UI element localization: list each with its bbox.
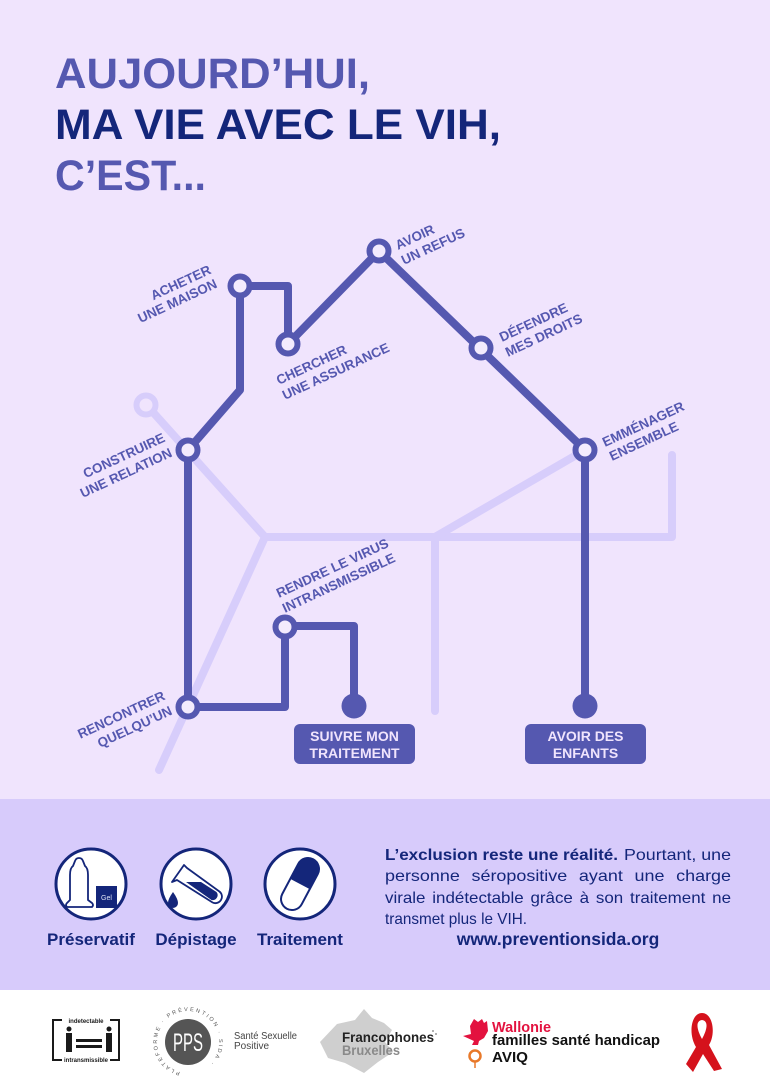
tag: suivre mon traitement: SUIVRE MON bbox=[310, 728, 399, 744]
text block: exclusion message: L’exclusion reste une réalité. bbox=[385, 847, 618, 864]
website link: www.preventionsida.org bbox=[456, 929, 659, 949]
label: acheter une maison: UNE MAISON bbox=[135, 276, 219, 326]
label: rencontrer quelqu'un: RENCONTRER bbox=[75, 688, 168, 742]
label: défendre mes droits: MES DROITS bbox=[503, 311, 585, 360]
title: MA VIE AVEC LE VIH, bbox=[55, 101, 501, 149]
label: avoir un refus: UN REFUS bbox=[399, 225, 467, 268]
label: emménager ensemble: EMMÉNAGER bbox=[600, 399, 687, 450]
tag: suivre mon traitement bbox=[294, 724, 415, 764]
logo: wallonie aviq: AVIQ bbox=[492, 1050, 528, 1066]
title: C’EST... bbox=[55, 152, 206, 200]
logo: wallonie aviq: Wallonie bbox=[492, 1020, 551, 1036]
label: rendre le virus intransmissible: RENDRE LE VIRUS bbox=[274, 536, 391, 601]
logo: i=i: indetectable bbox=[68, 1019, 104, 1025]
label: rendre le virus intransmissible: INTRANSMISSIBLE bbox=[280, 550, 398, 616]
label: construire une relation: UNE RELATION bbox=[78, 445, 174, 501]
icon: condom and gel: Gel bbox=[101, 895, 112, 902]
logo: plateforme prévention sida bbox=[153, 1007, 297, 1076]
label: chercher une assurance: UNE ASSURANCE bbox=[280, 340, 392, 403]
title bbox=[55, 50, 501, 200]
text block: exclusion message: Pourtant, une bbox=[624, 847, 731, 864]
logo: i=i bbox=[53, 1019, 119, 1064]
panel: partner logos bbox=[0, 990, 770, 1089]
tag: avoir des enfants: ENFANTS bbox=[553, 745, 618, 761]
text block: exclusion message bbox=[385, 847, 731, 928]
icon labels: Dépistage bbox=[155, 930, 237, 949]
label: rencontrer quelqu'un: QUELQU’UN bbox=[95, 703, 174, 751]
logo: francophones bruxelles: Francophones bbox=[342, 1030, 434, 1045]
logo: francophones bruxelles: Bruxelles bbox=[342, 1043, 400, 1058]
label: chercher une assurance: CHERCHER bbox=[274, 342, 349, 388]
icon: pill bbox=[265, 849, 335, 919]
terminus stations bbox=[342, 694, 598, 718]
logo: wallonie aviq: familles santé handicap bbox=[492, 1033, 660, 1049]
logo: francophones bruxelles bbox=[320, 1009, 437, 1073]
text block: exclusion message: virale indétectable grâce à son traitement ne bbox=[385, 890, 731, 907]
house metro line bbox=[188, 251, 585, 707]
icon: condom and gel bbox=[56, 849, 126, 919]
panel: prevention band bbox=[0, 799, 770, 990]
background metro lines bbox=[136, 396, 672, 770]
text block: exclusion message: transmet plus le VIH. bbox=[385, 911, 527, 928]
icon labels: Préservatif bbox=[47, 930, 135, 949]
icon: test tube bbox=[161, 849, 231, 919]
logo: plateforme prévention sida: Positive bbox=[234, 1041, 269, 1052]
label: acheter une maison: ACHETER bbox=[148, 262, 214, 303]
logo: plateforme prévention sida: PPS bbox=[173, 1029, 203, 1057]
logo: plateforme prévention sida: PLATEFORME · PRÉVENTION · SIDA · bbox=[153, 1007, 223, 1076]
stations bbox=[178, 242, 594, 716]
icon: red ribbon bbox=[686, 1013, 722, 1072]
label: avoir un refus: AVOIR bbox=[393, 221, 437, 253]
title: AUJOURD’HUI, bbox=[55, 50, 370, 98]
text block: exclusion message: personne séropositive ayant une charge bbox=[385, 868, 731, 885]
icon labels: Traitement bbox=[257, 930, 343, 949]
logo: plateforme prévention sida: Santé Sexuelle bbox=[234, 1031, 297, 1042]
tag: avoir des enfants: AVOIR DES bbox=[548, 728, 623, 744]
tag: suivre mon traitement: TRAITEMENT bbox=[309, 745, 400, 761]
label: emménager ensemble: ENSEMBLE bbox=[607, 419, 681, 464]
icon labels bbox=[47, 930, 343, 949]
logo: i=i: intransmissible bbox=[64, 1058, 109, 1064]
label: construire une relation: CONSTRUIRE bbox=[81, 430, 167, 481]
label: défendre mes droits: DÉFENDRE bbox=[497, 300, 570, 345]
logo: wallonie aviq bbox=[463, 1019, 660, 1068]
tag: avoir des enfants bbox=[525, 724, 646, 764]
